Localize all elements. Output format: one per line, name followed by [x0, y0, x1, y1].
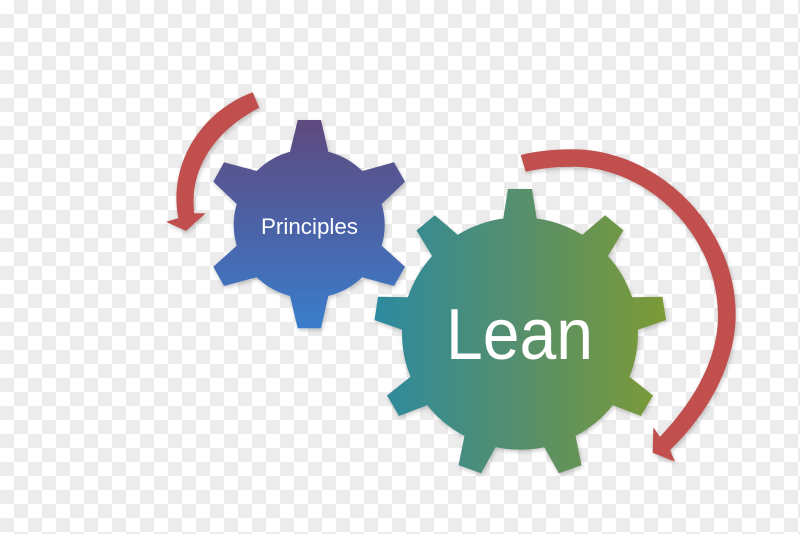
icon: Principles gear [213, 120, 405, 328]
arrow: large curved red arrow [521, 149, 736, 462]
arrow: small curved red arrow [166, 92, 259, 231]
label: Lean: Lean [446, 295, 593, 375]
icon: Lean gear [374, 189, 666, 473]
label: Principles: Principles [261, 214, 358, 239]
